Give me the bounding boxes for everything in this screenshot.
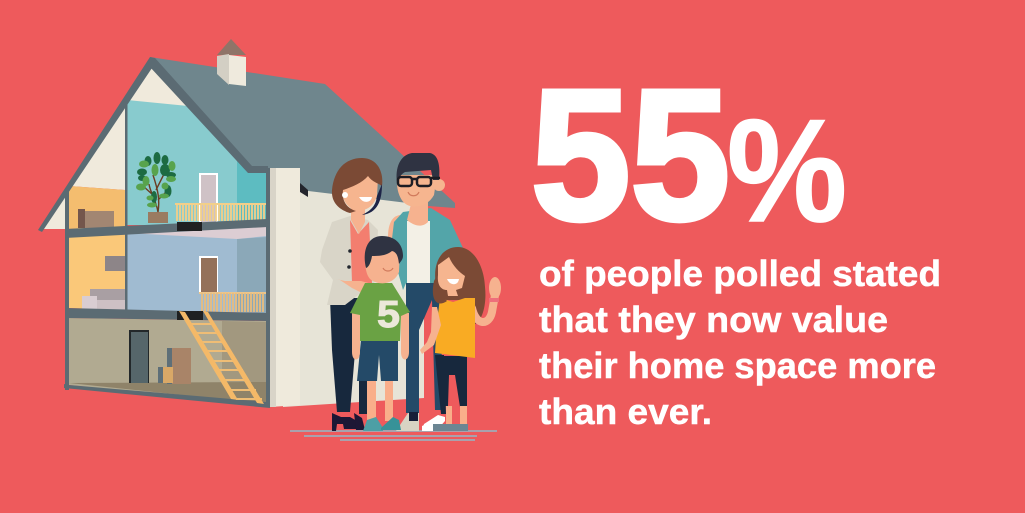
girl hair front [433,277,447,304]
boy shirt [350,283,410,341]
girl raised hand [489,277,501,299]
illustration: family [290,153,501,441]
basement [69,318,266,405]
floor openings [177,222,203,320]
ground shadow [290,430,497,441]
girl raised arm [472,295,495,322]
house frame [38,57,270,408]
statement text [539,253,941,432]
upstairs railing [175,203,267,221]
father trousers [406,282,443,413]
father shoes [396,413,419,431]
boy head [365,250,400,283]
potted plant [136,152,176,223]
girl face [438,257,465,296]
girl dress [435,298,475,358]
mother button details [347,249,352,269]
percent sign: % [727,89,847,252]
father glasses [398,177,440,186]
girl legs and shoes [446,406,467,424]
father smile [408,192,419,196]
girl [420,247,501,431]
upper orange room [69,186,125,229]
sofa [82,289,125,310]
statement text: their home space more [539,345,936,386]
basement door [129,330,149,383]
girl leggings [435,355,467,414]
shirt number: 5 [377,294,400,336]
father jacket [391,208,463,294]
father head [397,175,437,207]
boy [350,236,410,431]
father hair [397,153,439,182]
statement text: of people polled stated [539,253,941,294]
boy arms [352,313,409,360]
mother earring [342,192,348,198]
attic cream triangles [41,62,188,229]
statement text: than ever. [539,391,712,432]
55: 55 [531,52,730,259]
exterior side wall [270,168,424,407]
staircase [179,311,264,404]
middle blue room [127,227,267,313]
roof [150,57,455,208]
mother top [350,220,372,283]
boy shoes [363,417,383,431]
boy hair [365,236,403,268]
father hand on shoulder [388,215,400,240]
upstairs door [199,173,218,223]
upstairs brown cabinet [78,209,114,228]
boy legs [367,380,393,421]
mother hair [332,158,382,213]
mother neck and face [351,205,365,234]
mother cardigan [320,216,378,305]
pink ceiling [127,227,267,239]
girl wristband [489,298,499,302]
girl left arm [420,307,441,354]
mother legs [330,298,358,412]
wall picture [105,256,125,271]
father shirt [407,221,430,283]
middle orange room [69,233,125,310]
storage boxes [158,348,191,384]
girl smile [447,279,459,284]
illustration: house cross-section [38,39,455,408]
father neck [407,200,428,226]
mother [320,158,382,431]
middle door [199,256,218,293]
statement text: that they now value [539,299,888,340]
boy shorts [357,340,398,381]
chimney [217,39,246,86]
boy smile [383,268,393,271]
mother shoes [332,413,357,431]
girl hair back [435,247,485,325]
middle railing [199,292,267,312]
mother hand on boy [336,279,372,293]
father [388,153,463,431]
headline stat: 55% [531,52,847,259]
mother smile [359,197,372,202]
upper teal room [127,100,250,225]
